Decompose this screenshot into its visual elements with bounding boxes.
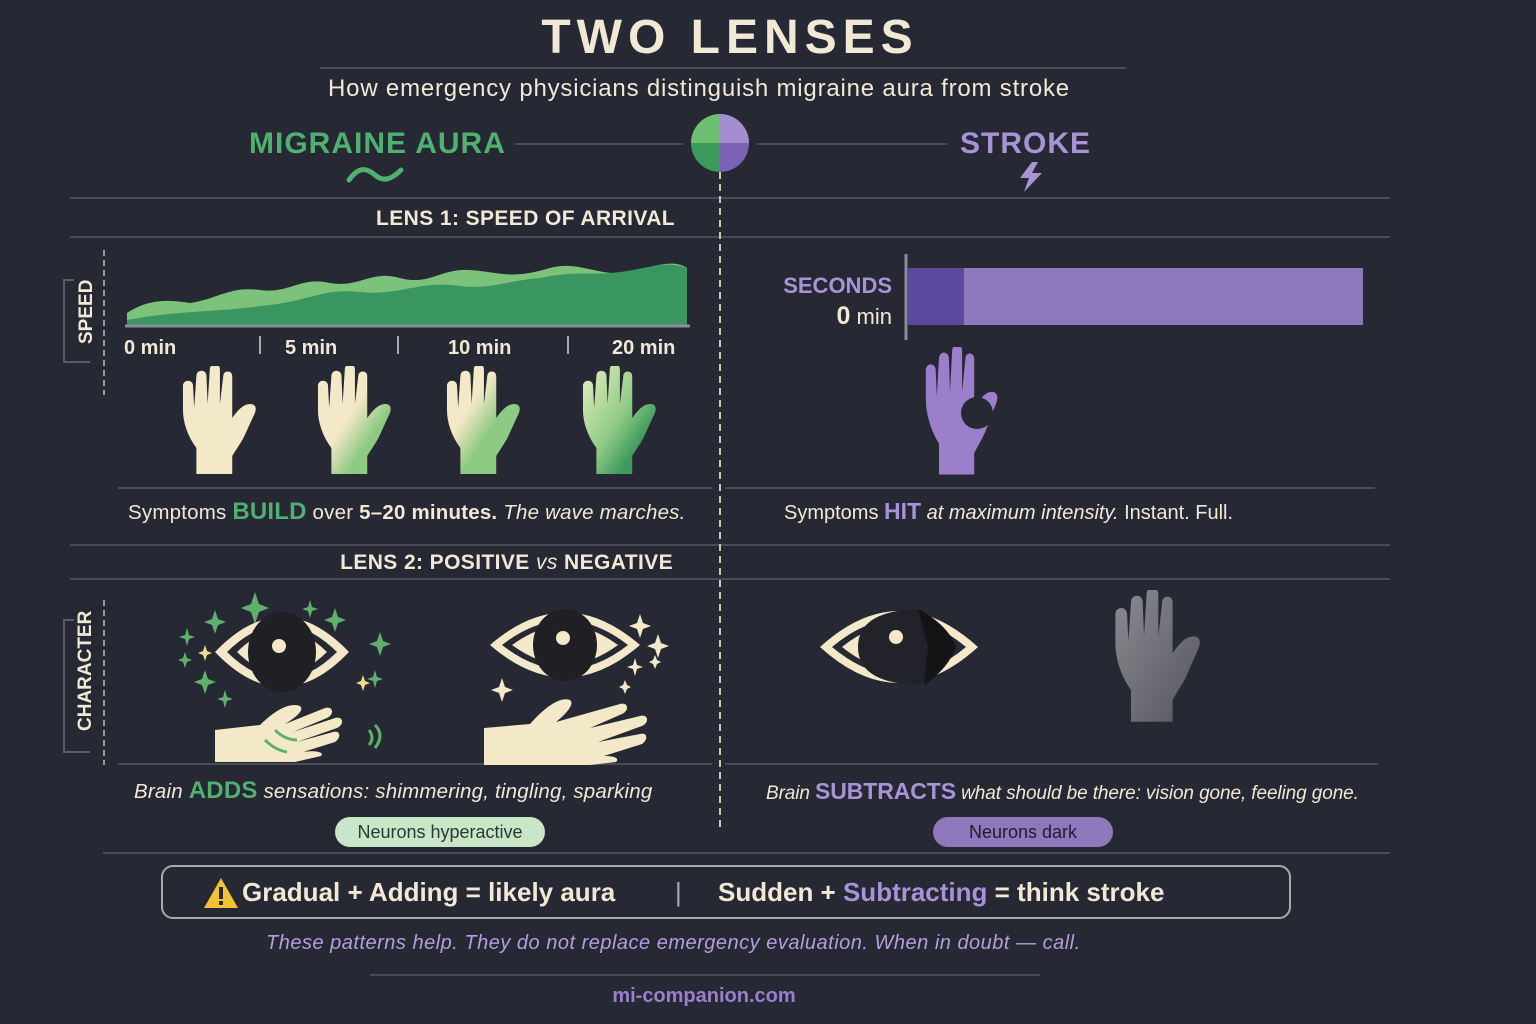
icon: tilde	[346, 167, 404, 182]
heading: stroke: STROKE	[960, 127, 1091, 160]
pill: neurons hyperactive	[335, 817, 545, 847]
footer url: mi-companion.com	[612, 985, 796, 1007]
text: brain subtracts: Brain SUBTRACTS what should be there: vision gone, feeling gone.	[766, 778, 1359, 804]
text: 20 min	[612, 337, 675, 359]
icons: progressing hands	[182, 366, 656, 474]
pill: neurons hyperactive: Neurons hyperactive	[357, 822, 523, 842]
pill: neurons dark: Neurons dark	[969, 822, 1077, 842]
icon: purple hand	[926, 347, 998, 474]
pill: neurons dark	[933, 817, 1113, 847]
summary box	[161, 865, 1291, 919]
label: seconds: SECONDS	[783, 273, 892, 298]
title: TWO LENSES	[541, 11, 919, 64]
summary text: Gradual + Adding = likely aura	[242, 877, 615, 907]
icon: lightning	[1020, 162, 1042, 192]
icon: grey numb hand	[1115, 590, 1200, 722]
icon: warning	[204, 878, 238, 908]
subtitle: How emergency physicians distinguish migraine aura from stroke	[328, 75, 1070, 102]
text: brain adds: Brain ADDS sensations: shimmering, tingling, sparking	[134, 777, 652, 804]
icon: plain eye and hand	[484, 609, 669, 765]
heading: migraine aura: MIGRAINE AURA	[249, 127, 506, 160]
text: 0 min	[837, 302, 892, 330]
label: character: CHARACTER	[75, 611, 96, 731]
text: symptoms build: Symptoms BUILD over 5–20 minutes. The wave marches.	[128, 498, 686, 525]
text: 5 min	[285, 337, 337, 359]
icon: sparkling eye and tingling hand	[178, 592, 391, 762]
summary box: |	[675, 877, 682, 907]
text: symptoms hit: Symptoms HIT at maximum intensity. Instant. Full.	[784, 498, 1233, 524]
bar: instant	[904, 254, 1363, 340]
chart: wave	[125, 264, 690, 328]
axis labels: 0 min	[124, 337, 176, 359]
summary box: Sudden + Subtracting = think stroke	[718, 877, 1164, 907]
text: 10 min	[448, 337, 511, 359]
icon: half-dark eye	[820, 609, 978, 685]
disclaimer: These patterns help. They do not replace emergency evaluation. When in doubt — call.	[266, 932, 1081, 954]
lens 1 heading: LENS 1: SPEED OF ARRIVAL	[376, 207, 675, 230]
icon: split circle	[691, 114, 749, 172]
label: speed: SPEED	[76, 280, 97, 344]
lens 2 heading: LENS 2: POSITIVE vs NEGATIVE	[340, 551, 673, 574]
